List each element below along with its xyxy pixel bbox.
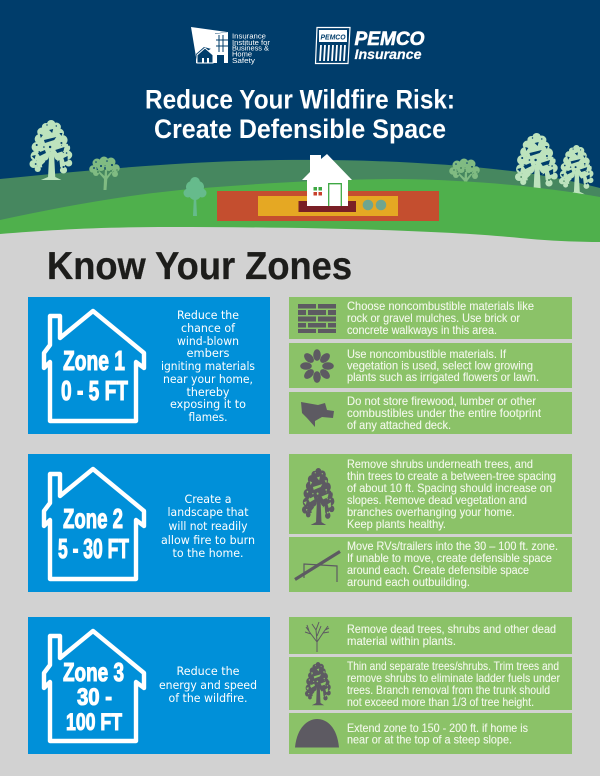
icon: deck (301, 402, 334, 427)
zone: middle yellow (258, 196, 398, 216)
icon: flower (300, 349, 334, 383)
icon: house outline (44, 469, 144, 579)
tip text: Extend zone to 150 - 200 ft. if home is (347, 721, 528, 735)
zone description (161, 492, 255, 560)
panel background (28, 297, 270, 434)
zone description: allow fire to burn (161, 533, 255, 547)
illustration: tree on lawn (184, 177, 206, 216)
heading: Know Your Zones: Know Your Zones (47, 245, 352, 288)
zone label: Zone 2 (63, 503, 123, 534)
logo: IBHS: Home (232, 52, 252, 58)
tip text: around each outbuilding. (347, 575, 470, 589)
zone label: 100 FT (66, 709, 122, 736)
tip text: Remove dead trees, shrubs and other dead (347, 622, 556, 636)
zone description: Reduce the (177, 308, 239, 322)
zone description: Create a (184, 492, 232, 506)
icon: trailer (295, 552, 340, 582)
illustration: defensible space zones around house (217, 154, 439, 221)
zone: outer red (217, 191, 439, 221)
title: Reduce Your Wildfire Risk: (145, 84, 455, 114)
tip text: not exceed more than 1/3 of tree height. (347, 695, 534, 709)
title (145, 84, 455, 144)
logo: IBHS: Business & (232, 46, 269, 52)
zone description: energy and speed (159, 678, 257, 692)
logo: PEMCO: Insurance (354, 47, 422, 62)
panel: zone 1 (28, 297, 270, 434)
tip text (347, 347, 539, 384)
tip text (347, 394, 542, 432)
icon: house outline (44, 311, 144, 421)
logo: IBHS: Safety (232, 58, 256, 65)
logo: IBHS: Insurance (232, 34, 266, 40)
panel: zone 2 (28, 454, 270, 592)
zone label (61, 345, 128, 406)
illustration: tree, far right (559, 145, 593, 194)
icon: slope mound (295, 719, 339, 748)
tip text (347, 659, 560, 709)
panel: zone 3 tip, dead trees (289, 617, 572, 654)
icon: dead tree (305, 622, 329, 652)
tip text: near or at the top of a steep slope. (347, 732, 512, 746)
zone description (159, 664, 257, 705)
tip text: plants such as irrigated flowers or lawn. (347, 370, 539, 384)
background: light green hill (0, 179, 600, 260)
tip text: branches overhanging your home. (347, 505, 515, 519)
tip text: Use noncombustible materials. If (347, 347, 507, 361)
tip text: rock or gravel mulches. Use brick or (347, 311, 520, 325)
zone label: 30 - (77, 684, 112, 711)
tip text: vegetation is used, select low growing (347, 358, 533, 372)
tip text (347, 721, 528, 746)
tip text: Thin and separate trees/shrubs. Trim trees and (347, 659, 559, 673)
zone description: near your home, (163, 372, 253, 386)
tip text (347, 622, 556, 648)
icon: house (302, 154, 352, 206)
tip text: slopes. Remove dead vegetation and (347, 493, 527, 507)
panel: zone 3 tip, slope (289, 713, 572, 754)
tip text: of any attached deck. (347, 418, 451, 432)
zone: inner maroon (298, 201, 356, 212)
zone description: Reduce the (176, 664, 240, 678)
zone description (161, 308, 255, 424)
tip text: thin trees to create a between-tree spacing (347, 469, 556, 483)
logo: PEMCO: PEMCO (320, 32, 346, 42)
zone label: 5 - 30 FT (58, 533, 129, 564)
tip text (347, 539, 558, 589)
panel background (28, 617, 270, 754)
tip text (347, 457, 556, 531)
illustration: tree, far left (30, 120, 72, 180)
panel: zone 1 tip, materials (289, 297, 572, 339)
panel: zone 1 tip, deck (289, 392, 572, 434)
logo: IBHS: Institute for (232, 40, 271, 47)
tip text: Keep plants healthy. (347, 517, 446, 531)
panel: zone 1 tip, vegetation (289, 343, 572, 388)
zone description: landscape that (168, 505, 249, 519)
zone description: wind-blown (177, 334, 239, 348)
zone description: of the wildfire. (168, 691, 248, 705)
background: dark green hill (0, 160, 600, 260)
tip text: Move RVs/trailers into the 30 – 100 ft. zone. (347, 539, 558, 553)
tip text (347, 299, 534, 337)
zone description: embers (186, 346, 230, 360)
panel: zone 2 tip, RVs (289, 537, 572, 592)
panel background (28, 454, 270, 592)
icon: tree (305, 662, 331, 705)
background: navy sky (0, 0, 600, 260)
icon: brick wall (298, 304, 336, 333)
panel: zone 3 (28, 617, 270, 754)
tip text: Remove shrubs underneath trees, and (347, 457, 533, 471)
zone description: flames. (188, 410, 228, 424)
icon: tree (302, 468, 334, 525)
logo: PEMCO: PEMCO (354, 28, 424, 50)
illustration: tree, left small (89, 156, 120, 190)
zone description: igniting materials (161, 359, 255, 373)
tip text: If unable to move, create defensible space (347, 551, 552, 565)
tip text: Choose noncombustible materials like (347, 299, 534, 313)
tip text: combustibles under the entire footprint (347, 406, 542, 420)
zone label: Zone 3 (63, 657, 124, 687)
tip text: of about 10 ft. Spacing should increase on (347, 481, 552, 495)
tip text: trees. Branch removal from the trunk should (347, 683, 550, 697)
zone description: will not readily (168, 519, 248, 533)
zone description: thereby (186, 385, 230, 399)
tip text: material within plants. (347, 634, 456, 648)
logo: IBHS (191, 27, 271, 65)
tip text: around each. Create defensible space (347, 563, 529, 577)
zone description: exposing it to (170, 397, 246, 411)
icon: shrubs (363, 200, 386, 210)
zone label: Zone 1 (63, 345, 125, 376)
tip text: remove shrubs to eliminate ladder fuels under (347, 671, 560, 685)
tip text: Do not store firewood, lumber or other (347, 394, 536, 408)
icon: house outline (44, 631, 144, 741)
zone label (63, 657, 124, 736)
zone description: to the home. (172, 546, 244, 560)
tip text: concrete walkways in this area. (347, 323, 497, 337)
illustration: tree, right large (515, 133, 558, 193)
panel: zone 3 tip, thinning (289, 657, 572, 710)
logo: PEMCO (316, 28, 424, 64)
panel: zone 2 tip, trees (289, 454, 572, 534)
zone label (58, 503, 129, 564)
title: Create Defensible Space (154, 114, 446, 144)
zone description: chance of (181, 321, 236, 335)
illustration: tree, right small (449, 158, 480, 192)
background: gray page (0, 227, 600, 776)
zone label: 0 - 5 FT (61, 375, 128, 406)
